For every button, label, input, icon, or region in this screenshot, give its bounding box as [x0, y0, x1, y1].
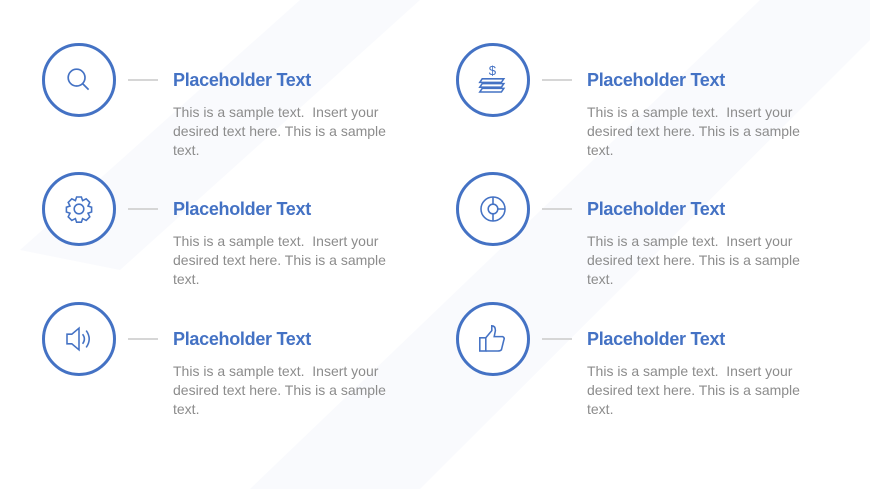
heading: Placeholder Text — [587, 199, 725, 219]
text: This is a sample text. Insert your desired text here. This is a sample text. — [587, 104, 800, 158]
text: This is a sample text. Insert your desired text here. This is a sample text. — [173, 104, 386, 158]
text: This is a sample text. Insert your desired text here. This is a sample text. — [587, 233, 800, 287]
heading: Placeholder Text — [587, 329, 725, 349]
heading: Placeholder Text — [173, 329, 311, 349]
icon: thumbs up — [456, 302, 530, 376]
icon: speaker — [42, 302, 116, 376]
heading: Placeholder Text — [587, 70, 725, 90]
item: settings — [42, 172, 386, 287]
text: This is a sample text. Insert your desired text here. This is a sample text. — [173, 233, 386, 287]
icon: money: $ — [489, 63, 497, 78]
icon: magnifier — [42, 43, 116, 117]
item: speaker — [42, 302, 386, 417]
heading: Placeholder Text — [173, 199, 311, 219]
icon: money — [456, 43, 530, 117]
item: search — [42, 43, 386, 158]
text: This is a sample text. Insert your desired text here. This is a sample text. — [173, 363, 386, 417]
icon: donut — [456, 172, 530, 246]
icon: gear — [42, 172, 116, 246]
heading: Placeholder Text — [173, 70, 311, 90]
item: money — [456, 43, 800, 158]
item: like — [456, 302, 800, 417]
item: chart — [456, 172, 800, 287]
text: This is a sample text. Insert your desired text here. This is a sample text. — [587, 363, 800, 417]
